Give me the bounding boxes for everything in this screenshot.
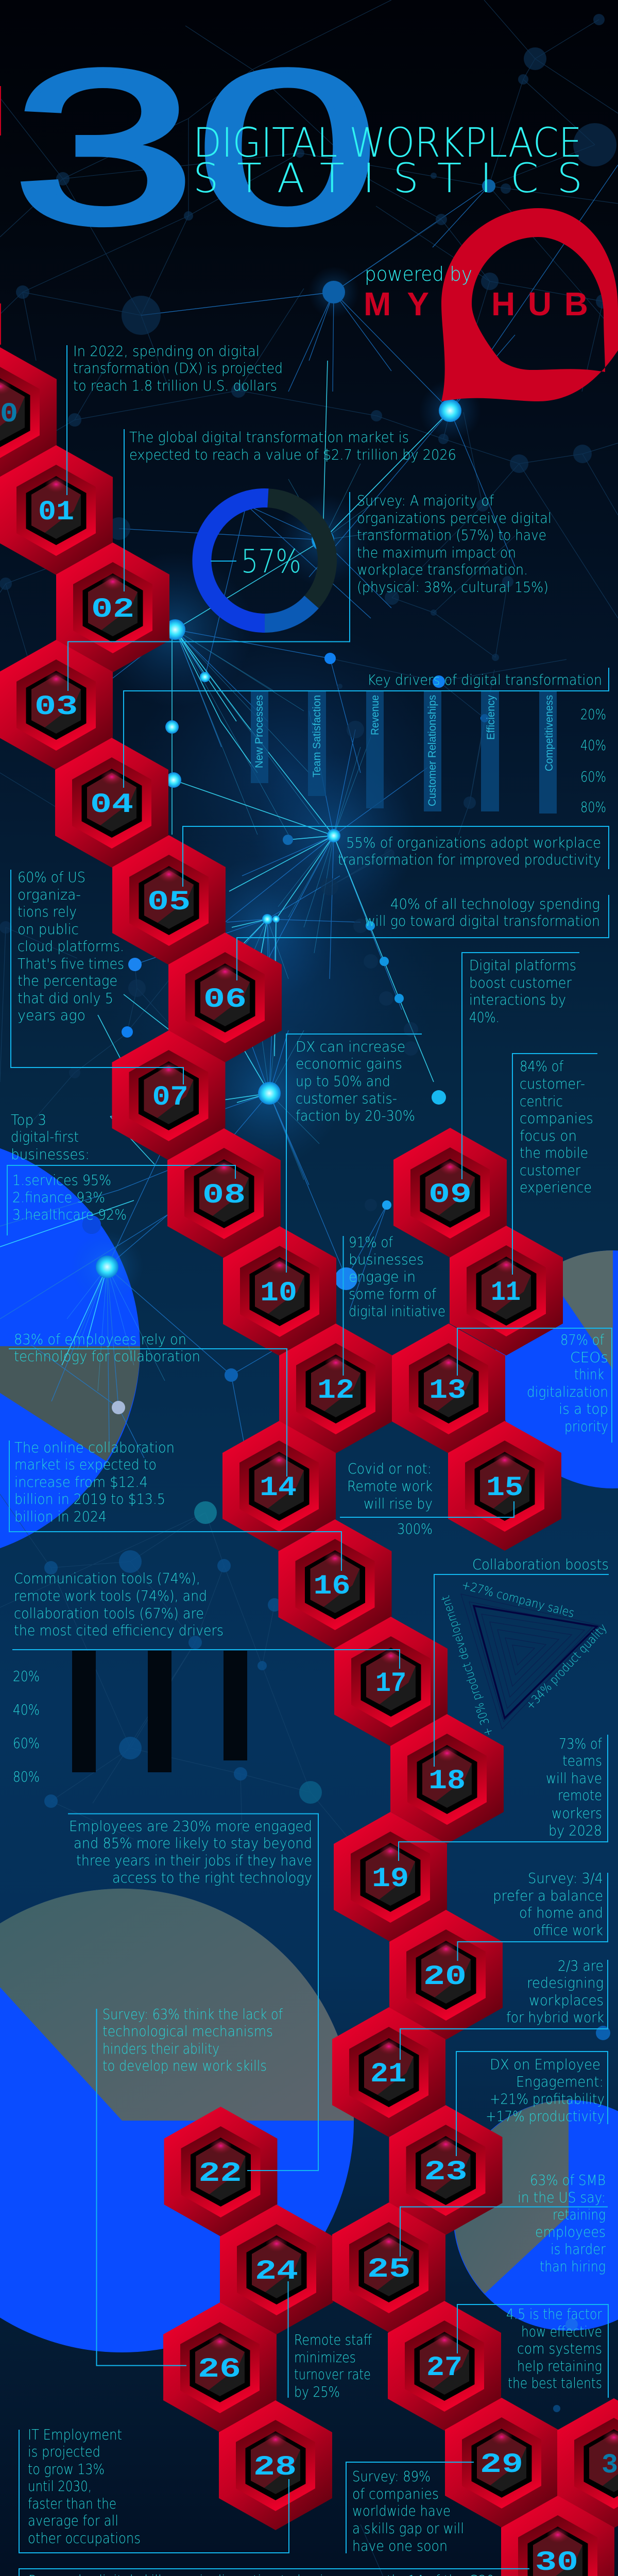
stat 01: spending on digital transformation bbox=[67, 343, 283, 495]
stat 22: engaged employees bbox=[68, 1814, 318, 2171]
stat 16: online collaboration market: market is expected to bbox=[14, 1456, 157, 1473]
badge 05: 05 bbox=[147, 887, 191, 918]
stat 19: teams with remote workers: will have bbox=[546, 1770, 602, 1787]
stat 03: survey on perceived impact: workplace transformation. bbox=[357, 561, 528, 578]
stat 03: survey on perceived impact: organizations perceive digital bbox=[357, 510, 552, 527]
stat 06: technology spending: 40% of all technology spending bbox=[390, 895, 600, 912]
stat 07: public cloud platforms: tions rely bbox=[18, 903, 77, 920]
stat 25: retaining employees: in the US say: bbox=[518, 2189, 606, 2206]
stat 19: teams with remote workers: remote bbox=[558, 1787, 602, 1804]
stat 04: key drivers bar chart: 40% bbox=[580, 737, 606, 754]
stat 29: skills gap survey: have one soon bbox=[352, 2537, 448, 2554]
stat 24: remote staff turnover: turnover rate bbox=[294, 2366, 371, 2383]
stat 22: engaged employees: access to the right technology bbox=[112, 1869, 312, 1886]
stat 04: key drivers bar chart: 60% bbox=[580, 768, 606, 785]
badge 06 bbox=[168, 933, 282, 1062]
stat 24: remote staff turnover: minimizes bbox=[294, 2349, 356, 2366]
stat 11: customer-centric companies: 84% of bbox=[520, 1058, 563, 1075]
stat 07: public cloud platforms: that did only 5 bbox=[18, 990, 113, 1007]
stat 13: CEOs think digitalization: think bbox=[574, 1366, 604, 1383]
stat 04: key drivers bar chart: Team Satisfaction bbox=[311, 695, 323, 777]
stat 03: survey on perceived impact: the maximum impact on bbox=[357, 544, 516, 561]
logo: MyHub speech bubble with powered by: MY bbox=[364, 285, 429, 323]
stat 08: top 3 digital-first businesses: 3.healthcare 92% bbox=[12, 1206, 127, 1223]
stat 17: efficiency drivers bar chart: 80% bbox=[13, 1768, 40, 1785]
stat 17: efficiency drivers bar chart: remote work tools (74%), and bbox=[14, 1587, 207, 1604]
stat 25: retaining employees bbox=[400, 2172, 608, 2275]
badge 23 bbox=[389, 2105, 503, 2235]
badge 15 bbox=[448, 1421, 561, 1551]
stat 13: CEOs think digitalization: is a top bbox=[559, 1400, 608, 1417]
badge 01 bbox=[0, 445, 113, 575]
badge 09 bbox=[393, 1128, 507, 1258]
title: digital workplace statistics bbox=[193, 120, 582, 202]
badge 13 bbox=[392, 1324, 505, 1453]
stat 09: digital platforms: 40%. bbox=[469, 1009, 500, 1026]
stat 01: spending on digital transformation: In 2022, spending on digital bbox=[73, 343, 260, 360]
stat 21: redesigning workplaces: 2/3 are bbox=[558, 1957, 604, 1974]
stat 05: workplace transformation for productivity: 55% of organizations adopt workplace bbox=[346, 834, 601, 851]
badge 21: 21 bbox=[370, 2059, 406, 2090]
stat 29: skills gap survey: a skills gap or will bbox=[352, 2520, 464, 2537]
title: digital workplace statistics: DIGITAL WORKPLACE bbox=[193, 120, 582, 166]
badge 13: 13 bbox=[429, 1375, 466, 1406]
stat 30: research on digital skills gap bbox=[19, 2569, 529, 2576]
stat 19: teams with remote workers bbox=[399, 1735, 608, 1861]
stat 11: customer-centric companies bbox=[512, 1054, 597, 1275]
badge 27 bbox=[388, 2301, 501, 2431]
stat 04: key drivers bar chart: 80% bbox=[580, 799, 606, 816]
stat 28: IT employment growth: average for all bbox=[28, 2512, 118, 2529]
stat 20: balance of home and office work: of home and bbox=[519, 1904, 603, 1921]
stat 28: IT employment growth: is projected bbox=[28, 2443, 100, 2460]
stat 20: balance of home and office work: prefer a balance bbox=[493, 1887, 603, 1904]
stat 25: retaining employees: than hiring bbox=[540, 2258, 606, 2275]
badge 16: 16 bbox=[313, 1571, 350, 1602]
stat 12: businesses engaged in digital initiative: some form of bbox=[349, 1285, 436, 1302]
stat 25: retaining employees: is harder bbox=[551, 2241, 606, 2258]
stat 22: engaged employees: three years in their jobs if they have bbox=[76, 1852, 312, 1869]
stat 11: customer-centric companies: experience bbox=[520, 1179, 592, 1196]
pie chart background: upper right bbox=[494, 1250, 618, 1488]
badge 26 bbox=[163, 2302, 277, 2432]
stat 09: digital platforms: Digital platforms bbox=[469, 957, 576, 974]
badge 11 bbox=[450, 1226, 563, 1355]
stat 24: remote staff turnover: Remote staff bbox=[294, 2331, 372, 2348]
stat 16: online collaboration market: billion in 2024 bbox=[14, 1508, 107, 1525]
badge 11: 11 bbox=[491, 1277, 521, 1309]
stat 28: IT employment growth: IT Employment bbox=[28, 2426, 122, 2443]
stat 23: DX on employee engagement bbox=[456, 2052, 608, 2156]
stat 23: DX on employee engagement: +17% productivity bbox=[486, 2108, 605, 2125]
badge 28: 28 bbox=[253, 2452, 297, 2483]
stat 04: key drivers bar chart: New Processes bbox=[253, 695, 265, 768]
donut chart: 57 percent: 57% bbox=[241, 543, 301, 580]
stat 08: top 3 digital-first businesses: 2.finance 93% bbox=[12, 1189, 105, 1206]
stat 29: skills gap survey: of companies bbox=[352, 2485, 439, 2502]
badge 06: 06 bbox=[203, 984, 247, 1015]
stat 03: survey on perceived impact bbox=[68, 492, 552, 691]
badge 26: 26 bbox=[198, 2354, 241, 2385]
badge 12: 12 bbox=[317, 1375, 354, 1406]
stat 07: public cloud platforms: on public bbox=[18, 921, 79, 938]
badge 14 bbox=[222, 1421, 336, 1551]
stat 20: balance of home and office work: office work bbox=[533, 1922, 603, 1939]
stat 23: DX on employee engagement: DX on Employee bbox=[490, 2056, 600, 2073]
badge 05 bbox=[112, 835, 226, 965]
title: large 30: 30 bbox=[12, 25, 379, 269]
stat 04: key drivers bar chart: Competitiveness bbox=[543, 695, 555, 771]
badge 29: 29 bbox=[480, 2449, 523, 2481]
stat 08: top 3 digital-first businesses bbox=[7, 1111, 235, 1235]
stat 21: redesigning workplaces: redesigning bbox=[527, 1974, 604, 1991]
title: digital workplace statistics: STATISTICS bbox=[193, 156, 582, 202]
stat 10: DX economic gains: up to 50% and bbox=[296, 1073, 390, 1090]
stat 06: technology spending bbox=[237, 895, 609, 980]
stat 01: spending on digital transformation: transformation (DX) is projected bbox=[73, 360, 283, 377]
stat 07: public cloud platforms: 60% of US bbox=[18, 869, 85, 886]
stat 08: top 3 digital-first businesses: businesses: bbox=[11, 1146, 90, 1163]
stat 18: collaboration boosts radar chart: Collaboration boosts bbox=[472, 1556, 609, 1573]
stat 22: engaged employees: and 85% more likely to stay beyond bbox=[74, 1835, 312, 1852]
badge 27: 27 bbox=[426, 2352, 462, 2384]
stat 07: public cloud platforms: years ago bbox=[18, 1007, 85, 1024]
stat 28: IT employment growth: faster than the bbox=[28, 2495, 116, 2512]
stat 09: digital platforms: interactions by bbox=[469, 991, 566, 1008]
stat 19: teams with remote workers: teams bbox=[562, 1752, 602, 1769]
stat 26: lack of technological mechanisms: to develop new work skills bbox=[102, 2057, 267, 2074]
stat 17: efficiency drivers bar chart: Communication tools (74%), bbox=[14, 1570, 200, 1587]
badge 04: 04 bbox=[90, 789, 133, 821]
badge 16 bbox=[278, 1519, 391, 1649]
stat 08: top 3 digital-first businesses: Top 3 bbox=[11, 1111, 46, 1128]
stat 17: efficiency drivers bar chart: 40% bbox=[13, 1701, 40, 1718]
stat 28: IT employment growth: to grow 13% bbox=[28, 2461, 105, 2478]
badge 15: 15 bbox=[486, 1472, 523, 1504]
stat 04: key drivers bar chart: Customer Relationships bbox=[426, 695, 438, 806]
stat 07: public cloud platforms bbox=[11, 869, 183, 1084]
badge 00 bbox=[0, 347, 57, 477]
badge 21 bbox=[332, 2007, 445, 2137]
stat 13: CEOs think digitalization: digitalization bbox=[527, 1383, 608, 1400]
left edge hexagon slivers bbox=[0, 86, 1, 345]
badge 25: 25 bbox=[367, 2254, 410, 2285]
stat 29: skills gap survey bbox=[346, 2462, 474, 2554]
badge 22 bbox=[164, 2107, 277, 2236]
badge 20 bbox=[389, 1910, 503, 2040]
badge 04 bbox=[55, 738, 168, 868]
pie chart background: lower right bbox=[453, 2100, 618, 2331]
stat 17: efficiency drivers bar chart: the most cited efficiency drivers bbox=[14, 1622, 224, 1639]
stat 26: lack of technological mechanisms: Survey: 63% think the lack of bbox=[102, 2006, 283, 2023]
stat 21: redesigning workplaces: for hybrid work bbox=[506, 2009, 604, 2026]
badge 25 bbox=[332, 2202, 445, 2332]
badge 12 bbox=[279, 1324, 392, 1453]
stat 02: global market value bbox=[124, 429, 456, 591]
stat 10: DX economic gains: faction by 20-30% bbox=[296, 1107, 415, 1124]
badge 17: 17 bbox=[375, 1668, 406, 1700]
stat 10: DX economic gains: customer satis- bbox=[296, 1090, 397, 1107]
stat 25: retaining employees: employees bbox=[535, 2224, 606, 2240]
badge 10: 10 bbox=[260, 1278, 297, 1309]
stat 11: customer-centric companies: centric bbox=[520, 1093, 563, 1110]
stat 16: online collaboration market: billion in 2019 to $13.5 bbox=[14, 1490, 165, 1507]
stat 02: global market value: expected to reach a value of $2.7 trillion by 2026 bbox=[129, 446, 456, 463]
stat 17: efficiency drivers bar chart: collaboration tools (67%) are bbox=[14, 1605, 204, 1622]
stat 29: skills gap survey: Survey: 89% bbox=[352, 2468, 431, 2485]
stat 13: CEOs think digitalization bbox=[457, 1328, 612, 1443]
logo: MyHub speech bubble with powered by: HUB bbox=[491, 285, 588, 323]
stat 03: survey on perceived impact: transformation (57%) to have bbox=[357, 527, 546, 544]
stat 04: key drivers bar chart: Efficiency bbox=[485, 695, 497, 740]
stat 21: redesigning workplaces: workplaces bbox=[529, 1992, 604, 2009]
stat 14: employees rely on technology: 83% of employees rely on bbox=[14, 1331, 186, 1348]
stat 12: businesses engaged in digital initiative: digital initiative bbox=[349, 1302, 445, 1320]
badge 18 bbox=[390, 1714, 504, 1844]
badge 30 bbox=[501, 2496, 614, 2576]
stat 10: DX economic gains bbox=[286, 1034, 422, 1273]
stat 07: public cloud platforms: cloud platforms. bbox=[18, 938, 124, 955]
stat 28: IT employment growth bbox=[19, 2426, 289, 2553]
stat 03: survey on perceived impact: Survey: A majority of bbox=[357, 492, 494, 509]
badge 29 bbox=[445, 2398, 558, 2528]
stat 04: key drivers bar chart: 20% bbox=[580, 706, 606, 723]
badge 23: 23 bbox=[424, 2157, 468, 2188]
stat 16: online collaboration market bbox=[9, 1439, 341, 1571]
stat 15: remote work rise: Remote work bbox=[347, 1478, 433, 1495]
stat 28: IT employment growth: other occupations bbox=[28, 2530, 141, 2547]
stat 14: employees rely on technology: technology for collaboration bbox=[14, 1348, 200, 1365]
badge 17 bbox=[334, 1617, 448, 1747]
stat 02: global market value: The global digital transformation market is bbox=[129, 429, 409, 446]
stat 07: public cloud platforms: the percentage bbox=[18, 972, 117, 989]
stat 17: efficiency drivers bar chart bbox=[12, 1570, 400, 1785]
badge 31 bbox=[557, 2398, 618, 2528]
stat 24: remote staff turnover: by 25% bbox=[294, 2383, 340, 2400]
badge 19: 19 bbox=[372, 1863, 409, 1895]
stat 21: redesigning workplaces bbox=[400, 1957, 608, 2060]
stat 11: customer-centric companies: focus on bbox=[520, 1127, 577, 1144]
stat 10: DX economic gains: DX can increase bbox=[296, 1038, 405, 1055]
donut chart: 57 percent bbox=[202, 498, 327, 623]
badge 02 bbox=[56, 543, 169, 672]
pie chart background: upper left bbox=[0, 1136, 140, 1561]
badge 24 bbox=[220, 2205, 333, 2334]
stat 12: businesses engaged in digital initiative bbox=[343, 1233, 445, 1376]
stat 27: effective com systems: help retaining bbox=[517, 2358, 602, 2375]
badge 03: 03 bbox=[35, 691, 78, 723]
stat 22: engaged employees: Employees are 230% more engaged bbox=[69, 1818, 312, 1835]
stat 19: teams with remote workers: workers bbox=[552, 1805, 602, 1822]
stat 16: online collaboration market: increase from $12.4 bbox=[14, 1473, 148, 1490]
stat 15: remote work rise: 300% bbox=[397, 1520, 433, 1537]
stat 26: lack of technological mechanisms bbox=[97, 2006, 283, 2366]
stat 15: remote work rise bbox=[340, 1460, 514, 1537]
stat 20: balance of home and office work bbox=[457, 1870, 608, 1961]
badge 01: 01 bbox=[38, 497, 74, 528]
stat 15: remote work rise: will rise by bbox=[364, 1495, 433, 1512]
badge 03 bbox=[0, 640, 113, 770]
badge 28 bbox=[219, 2400, 332, 2530]
stat 26: lack of technological mechanisms: technological mechanisms bbox=[102, 2023, 273, 2040]
stat 13: CEOs think digitalization: 87% of bbox=[560, 1331, 604, 1348]
stat 26: lack of technological mechanisms: hinders their ability bbox=[102, 2040, 219, 2057]
stat 20: balance of home and office work: Survey: 3/4 bbox=[528, 1870, 603, 1887]
stat 07: public cloud platforms: organiza- bbox=[18, 886, 81, 903]
badge 22: 22 bbox=[199, 2158, 242, 2190]
badge 02: 02 bbox=[91, 594, 134, 625]
stat 10: DX economic gains: economic gains bbox=[296, 1055, 402, 1072]
badge 08 bbox=[167, 1128, 281, 1258]
stat 04: key drivers bar chart: Revenue bbox=[369, 695, 381, 735]
stat 12: businesses engaged in digital initiative: businesses bbox=[349, 1251, 424, 1268]
stat 29: skills gap survey: worldwide have bbox=[352, 2502, 451, 2519]
stat 14: employees rely on technology bbox=[9, 1331, 287, 1477]
stat 09: digital platforms bbox=[462, 953, 579, 1179]
stat 27: effective com systems bbox=[457, 2304, 608, 2398]
stat 09: digital platforms: boost customer bbox=[469, 974, 572, 991]
stat 11: customer-centric companies: the mobile bbox=[520, 1144, 588, 1161]
stat 05: workplace transformation for productivity bbox=[183, 826, 609, 887]
stat 18: collaboration boosts radar chart bbox=[434, 1556, 610, 1767]
stat 11: customer-centric companies: customer bbox=[520, 1162, 580, 1179]
stat 19: teams with remote workers: by 2028 bbox=[548, 1822, 602, 1839]
badge 24: 24 bbox=[255, 2256, 298, 2287]
badge 20: 20 bbox=[423, 1961, 467, 1993]
stat 06: technology spending: will go toward digital transformation bbox=[365, 912, 600, 929]
stat 27: effective com systems: 4.5 is the factor bbox=[506, 2306, 602, 2323]
stat 18: collaboration boosts radar chart: + 30% product development bbox=[439, 1594, 496, 1738]
badge 09: 09 bbox=[428, 1179, 472, 1211]
stat 12: businesses engaged in digital initiative: 91% of bbox=[349, 1233, 393, 1251]
stat 25: retaining employees: retaining bbox=[553, 2206, 606, 2223]
stat 13: CEOs think digitalization: priority bbox=[564, 1418, 608, 1435]
stat 08: top 3 digital-first businesses: digital-first bbox=[11, 1128, 79, 1145]
badge 07: 07 bbox=[152, 1082, 188, 1113]
badge 18: 18 bbox=[428, 1766, 466, 1797]
stat 03: survey on perceived impact: (physical: 38%, cultural 15%) bbox=[357, 579, 548, 596]
stat 04: key drivers bar chart bbox=[124, 668, 609, 816]
badge 08: 08 bbox=[202, 1180, 246, 1211]
stat 23: DX on employee engagement: +21% profitability bbox=[490, 2091, 605, 2107]
stat 19: teams with remote workers: 73% of bbox=[559, 1735, 602, 1752]
stat 13: CEOs think digitalization: CEOs bbox=[570, 1349, 608, 1366]
stat 18: collaboration boosts radar chart: +27% company sales bbox=[460, 1579, 576, 1620]
stat 25: retaining employees: 63% of SMB bbox=[530, 2172, 606, 2189]
stat 11: customer-centric companies: customer- bbox=[520, 1075, 585, 1092]
stat 17: efficiency drivers bar chart: 20% bbox=[13, 1668, 40, 1685]
stat 28: IT employment growth: until 2030, bbox=[28, 2478, 92, 2495]
stat 15: remote work rise: Covid or not: bbox=[348, 1460, 432, 1477]
badge 14: 14 bbox=[260, 1472, 297, 1504]
badge 07 bbox=[112, 1030, 226, 1160]
logo: MyHub speech bubble with powered by bbox=[364, 208, 618, 401]
stat 01: spending on digital transformation: to reach 1.8 trillion U.S. dollars bbox=[73, 377, 277, 394]
stat 23: DX on employee engagement: Engagement: bbox=[516, 2073, 604, 2090]
pie chart background: large lower left bbox=[0, 1889, 354, 2352]
stat 24: remote staff turnover bbox=[288, 2281, 372, 2400]
stat 17: efficiency drivers bar chart: 60% bbox=[13, 1735, 40, 1752]
stat 11: customer-centric companies: companies bbox=[520, 1110, 593, 1127]
stat 08: top 3 digital-first businesses: 1.services 95% bbox=[12, 1172, 111, 1189]
stat 27: effective com systems: com systems bbox=[517, 2340, 602, 2357]
badge 31: 3 bbox=[602, 2450, 618, 2481]
stat 12: businesses engaged in digital initiative: engage in bbox=[349, 1268, 416, 1285]
badge 19 bbox=[334, 1812, 447, 1942]
stat 07: public cloud platforms: That's five times bbox=[18, 955, 124, 972]
badge 10 bbox=[223, 1226, 336, 1356]
stat 16: online collaboration market: The online collaboration bbox=[14, 1439, 175, 1456]
stat 27: effective com systems: how effective bbox=[521, 2323, 602, 2340]
logo: MyHub speech bubble with powered by: powered by bbox=[365, 263, 472, 285]
